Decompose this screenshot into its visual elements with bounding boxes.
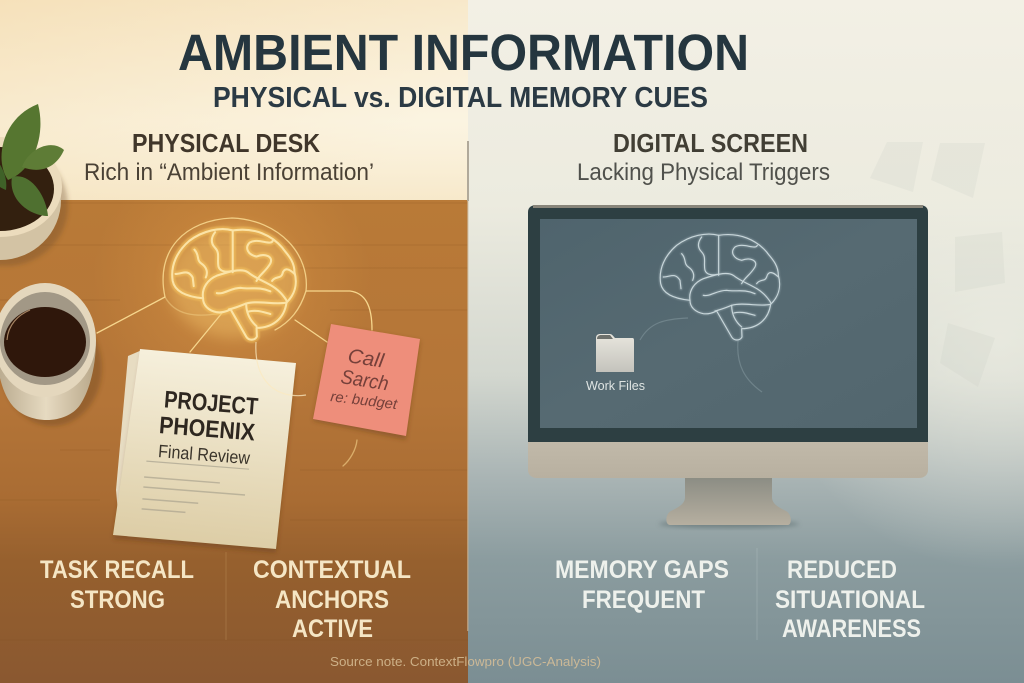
desk surface: [0, 200, 468, 683]
ghost paper outlines: [870, 142, 1005, 387]
stat: memory gaps frequent: MEMORY GAPS: [555, 556, 729, 584]
subtitle: PHYSICAL vs. DIGITAL MEMORY CUES: [213, 82, 708, 114]
panel: physical desk heading: [84, 128, 374, 186]
stat: reduced situational awareness: SITUATIONAL: [775, 586, 925, 614]
sticky note: Sarch: [339, 366, 390, 395]
connectors and halo: [97, 218, 372, 466]
document: project phoenix: PROJECT: [163, 386, 259, 421]
title: AMBIENT INFORMATION: [178, 24, 749, 81]
stat: reduced situational awareness: [775, 556, 925, 643]
background: left wall: [0, 0, 468, 202]
stat: contextual anchors active: CONTEXTUAL: [253, 556, 411, 584]
icon: folder: [596, 334, 634, 372]
icon: coffee mug: [0, 283, 102, 426]
stat: task recall strong: TASK RECALL: [40, 556, 194, 584]
sticky note: re: budget: [330, 389, 399, 413]
stat: task recall strong: STRONG: [70, 586, 165, 614]
panel: digital screen heading: Lacking Physical Triggers: [577, 159, 830, 186]
stat: contextual anchors active: [253, 556, 411, 643]
sticky note: Call: [346, 345, 386, 373]
glowing brain with connectors: [97, 218, 372, 466]
screen: [540, 219, 917, 428]
stat: contextual anchors active: ACTIVE: [292, 615, 373, 643]
sticky note: [313, 324, 420, 440]
panel: digital screen heading: DIGITAL SCREEN: [613, 128, 808, 158]
stat: reduced situational awareness: REDUCED: [787, 556, 897, 584]
stat: reduced situational awareness: AWARENESS: [782, 615, 921, 643]
panel: physical desk heading: PHYSICAL DESK: [132, 128, 320, 158]
stat: contextual anchors active: ANCHORS: [275, 586, 389, 614]
document: project phoenix: [113, 349, 296, 553]
stat dividers: [225, 552, 227, 640]
stat: task recall strong: [40, 556, 194, 614]
folder label: Work Files: [586, 379, 645, 393]
faded brain: [640, 234, 780, 392]
stat: memory gaps frequent: FREQUENT: [582, 586, 705, 614]
background: right panel: [468, 0, 1024, 683]
connector across the paper: [256, 342, 306, 396]
stat: memory gaps frequent: [555, 556, 729, 614]
monitor stand: [666, 478, 791, 525]
panel: digital screen heading: [577, 128, 830, 186]
digital monitor: [528, 205, 928, 528]
monitor bezel: [528, 205, 928, 442]
document: project phoenix: PHOENIX: [158, 412, 256, 446]
document: project phoenix: Final Review: [157, 441, 252, 468]
panel: physical desk heading: Rich in “Ambient Information’: [84, 159, 374, 186]
icon: potted plant: [0, 104, 68, 266]
source note: Source note. ContextFlowpro (UGC-Analysis): [330, 654, 601, 669]
center divider: [467, 141, 469, 631]
monitor chin: [528, 442, 928, 478]
